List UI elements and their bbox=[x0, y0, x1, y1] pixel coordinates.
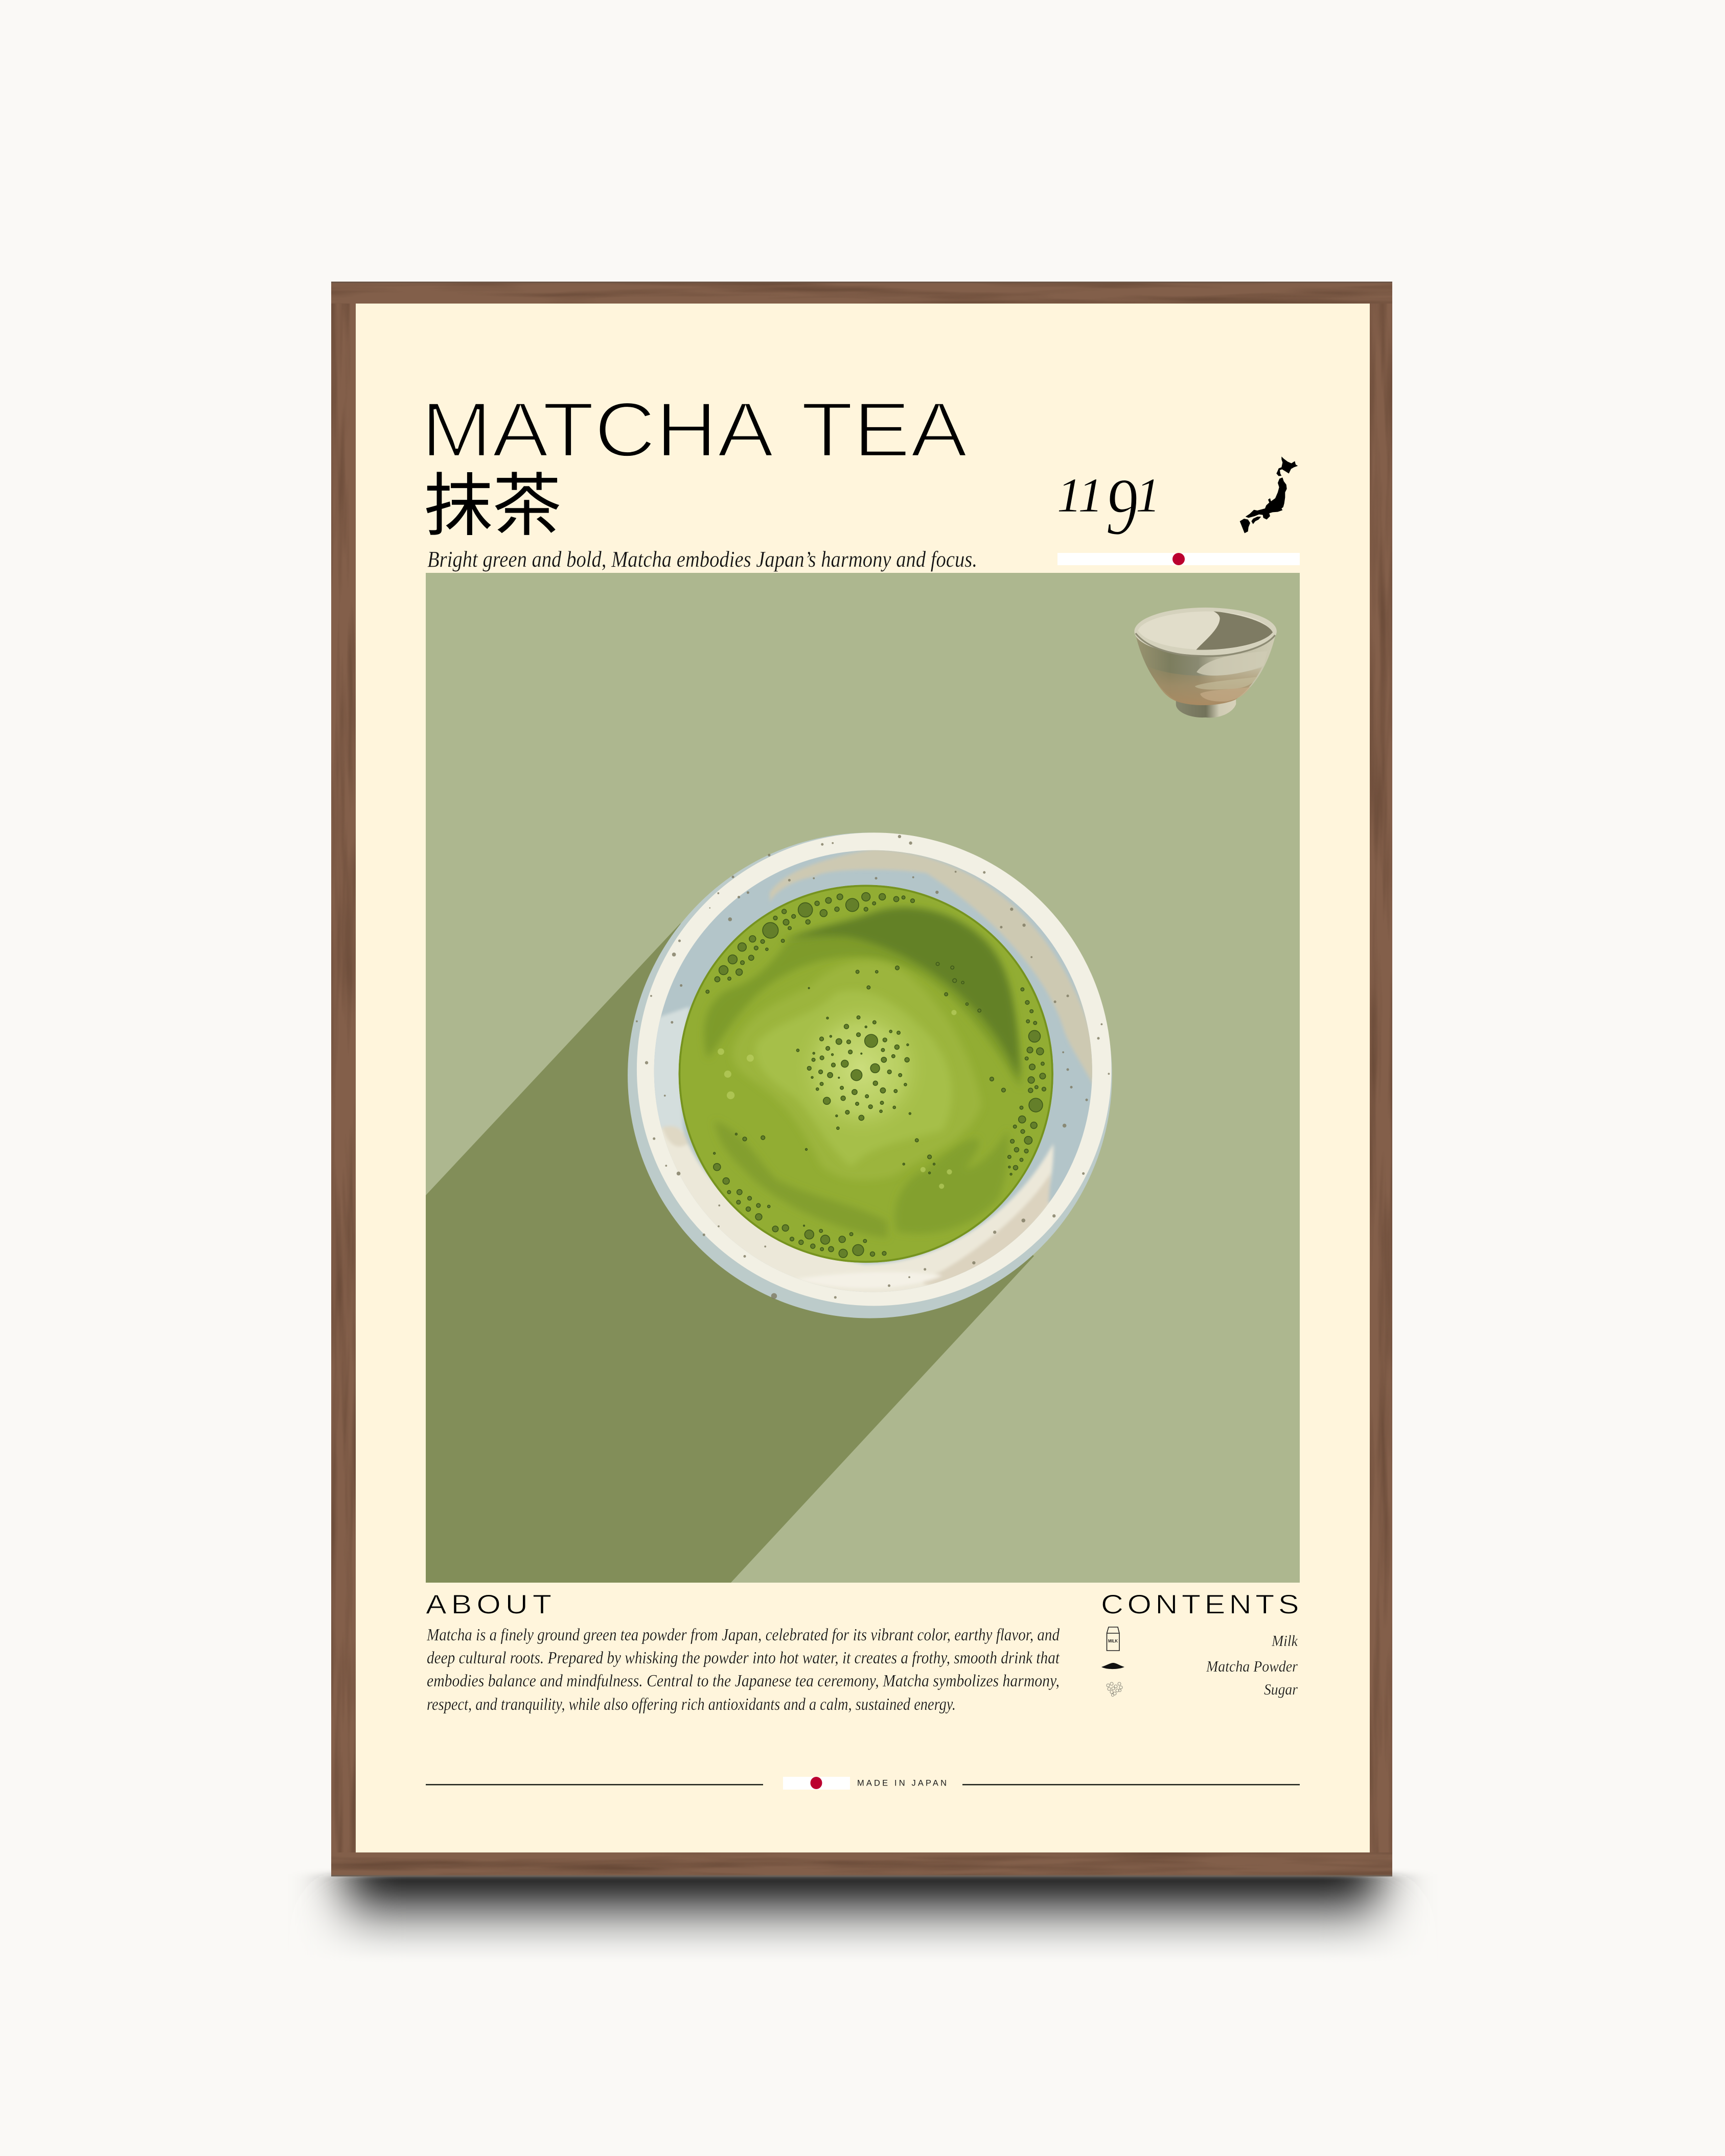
text block: about paragraph: Matcha is a finely ground green tea powder from Japan, celebrated for its vibrant color, earthy flavor, and bbox=[426, 1626, 1060, 1644]
text block: about paragraph: embodies balance and mindfulness. Central to the Japanese tea ceremony, Matcha symbolizes harmony, bbox=[427, 1672, 1060, 1690]
bowl body bbox=[1135, 631, 1276, 705]
subtitle: Bright green and bold, Matcha embodies Japan’s harmony and focus. bbox=[427, 547, 977, 572]
footer: made in japan bbox=[426, 1777, 1300, 1790]
icon: matcha powder pile bbox=[1101, 1663, 1124, 1669]
year 1191: 9 bbox=[1106, 461, 1138, 552]
japanese title: 抹茶 bbox=[424, 468, 561, 544]
title: MATCHA TEA: TEA bbox=[801, 386, 968, 473]
wooden frame bbox=[331, 282, 1392, 1876]
footer: made in japan: MADE IN JAPAN bbox=[857, 1778, 947, 1788]
heading: CONTENTS: CONTENTS bbox=[1101, 1589, 1299, 1620]
year 1191: 1 bbox=[1136, 468, 1160, 522]
contents list bbox=[1206, 1632, 1298, 1698]
bowl interior bbox=[1134, 608, 1277, 655]
icon: milk carton bbox=[1107, 1627, 1119, 1651]
poster paper bbox=[356, 304, 1370, 1852]
text block: about paragraph: deep cultural roots. Prepared by whisking the powder into hot water, it creates a frothy, smooth drink that bbox=[427, 1649, 1060, 1667]
icon: milk carton: MILK bbox=[1108, 1639, 1118, 1643]
bowl foot bbox=[1176, 697, 1236, 717]
heading: ABOUT: ABOUT bbox=[426, 1589, 551, 1620]
text block: about paragraph bbox=[426, 1626, 1060, 1714]
bowl ceramic bbox=[628, 832, 1112, 1318]
frame drop shadow bbox=[347, 1874, 1379, 1960]
illustration: matcha bowl top view bbox=[628, 832, 1112, 1318]
year 1191 bbox=[1057, 461, 1160, 552]
long cast shadow bbox=[426, 923, 1034, 1583]
matcha tea surface bbox=[679, 885, 1053, 1263]
icon: map of japan bbox=[1240, 456, 1298, 533]
flag stripe bbox=[1057, 553, 1300, 565]
foam bubbles bbox=[706, 893, 1046, 1258]
title: MATCHA TEA: MATCHA bbox=[421, 386, 774, 473]
panel: illustration background bbox=[426, 573, 1300, 1583]
contents list: Matcha Powder bbox=[1206, 1657, 1298, 1675]
contents list: Milk bbox=[1271, 1632, 1298, 1650]
title: MATCHA TEA bbox=[421, 386, 968, 473]
ceramic speckles bbox=[636, 835, 1110, 1299]
illustration: side view tea bowl bbox=[1134, 608, 1277, 717]
year 1191: 11 bbox=[1057, 468, 1103, 522]
icon: sugar crystals bbox=[1107, 1682, 1122, 1697]
light droplets bbox=[718, 1010, 957, 1189]
contents list: Sugar bbox=[1264, 1680, 1298, 1698]
text block: about paragraph: respect, and tranquility, while also offering rich antioxidants and a calm, sustained energy. bbox=[427, 1695, 956, 1714]
